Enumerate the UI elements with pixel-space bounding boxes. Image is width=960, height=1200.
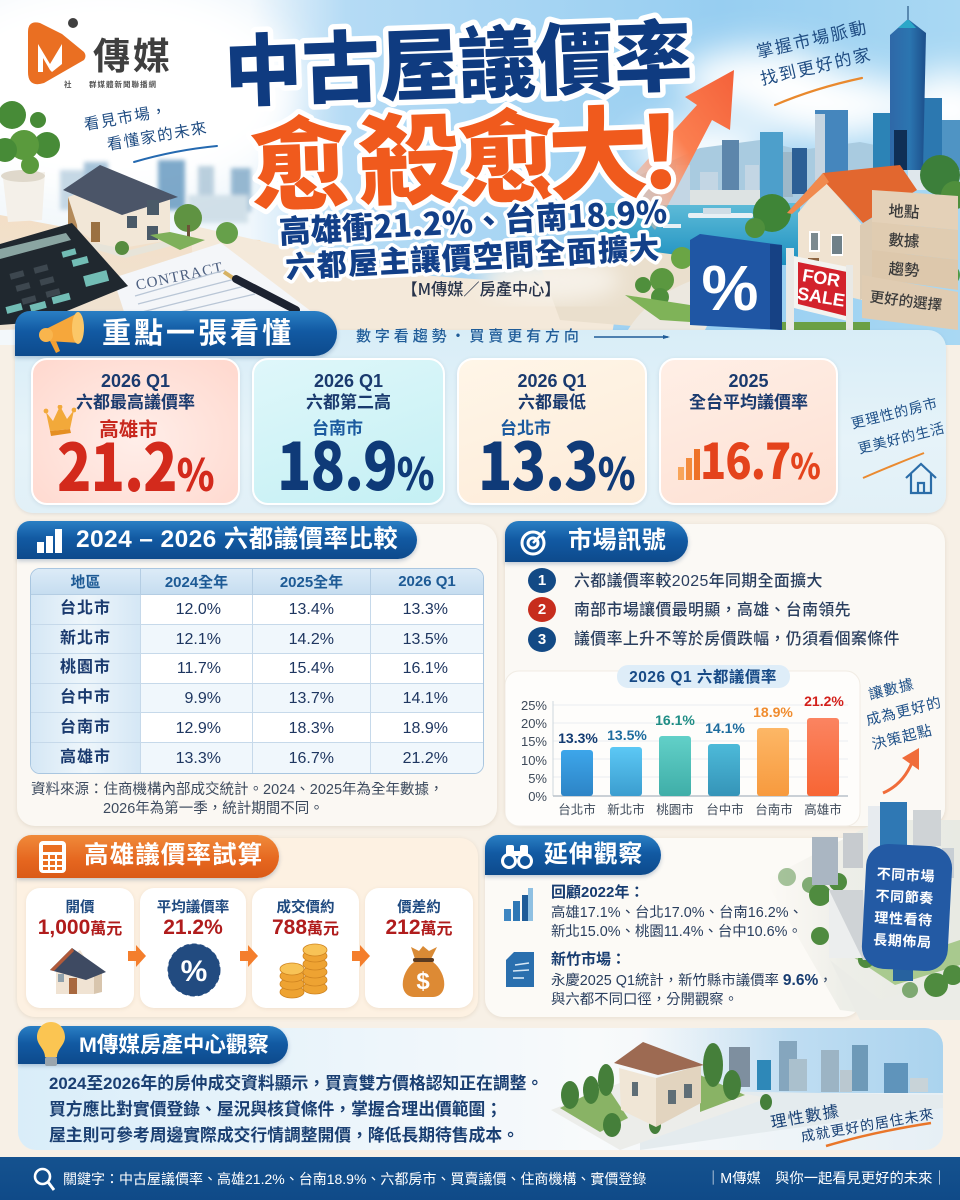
- stat card: Taipei: 台北市: [500, 419, 551, 438]
- bar chart: 2026 Q1: 25%: [521, 698, 547, 713]
- blue sign: 不同市場: [876, 865, 935, 884]
- stone blocks with words: 趨勢: [888, 260, 920, 280]
- bar chart: 2026 Q1: 18.9%: [753, 704, 793, 720]
- stat card: Taipei: 13.3%: [478, 415, 635, 509]
- comparison table: 13.5%: [403, 631, 448, 648]
- comparison table: 13.7%: [289, 690, 334, 707]
- subtitle line 1: 高雄衝21.2%、台南18.9%: [278, 187, 668, 253]
- contract: CONTRACT: [135, 260, 225, 294]
- comparison table: 21.2%: [403, 750, 448, 767]
- comparison table: 13.4%: [289, 601, 334, 618]
- stat card: national average: 2025: [728, 371, 769, 391]
- icon: magnifier: [34, 1168, 55, 1191]
- bar chart: 2026 Q1: 14.1%: [705, 720, 745, 736]
- observation text: 買方應比對實價登錄、屋況與核貸條件，掌握合理出價範圍；: [49, 1100, 502, 1119]
- stat card: Taipei: [457, 358, 647, 505]
- panel: key figures: [15, 330, 946, 513]
- logo: 群媒體新聞聯播網: [89, 79, 157, 90]
- panel: market signals: [505, 524, 945, 826]
- icon: percent badge: %: [181, 955, 207, 988]
- comparison table: 11.7%: [177, 660, 221, 677]
- signal 1: [528, 568, 823, 593]
- stat card: Kaohsiung: [31, 358, 240, 505]
- heading: M media observation: M傳媒房產中心觀察: [79, 1033, 269, 1057]
- comparison table: 9.9%: [185, 690, 221, 707]
- subtitle line 2: 六都屋主讓價空間全面擴大: [284, 223, 662, 287]
- boats: [663, 208, 753, 228]
- calc card: deal price: 成交價約: [276, 900, 334, 916]
- arrow 3: [352, 945, 370, 967]
- keywords: 關鍵字：中古屋議價率、高雄21.2%、台南18.9%、六都房市、買賣議價、住商機構、實價登錄: [63, 1171, 646, 1187]
- heading: M media observation: [18, 1026, 288, 1064]
- handwritten note: rational data: 理性數據: [768, 1097, 842, 1133]
- calc card: price difference: [365, 888, 473, 1008]
- trees right: [625, 155, 960, 332]
- bar chart: 2026 Q1: 2026 Q1 六都議價率: [629, 667, 777, 686]
- potted plant: [0, 101, 60, 222]
- desk surface: [0, 215, 330, 330]
- handwritten note: better life: 更美好的生活: [856, 418, 947, 458]
- icon: calculator: [39, 841, 66, 873]
- review 2022 block: 高雄17.1%、台北17.0%、台南16.2%、: [551, 905, 803, 921]
- slogan: ｜M傳媒 與你一起看見更好的未來｜: [706, 1171, 947, 1187]
- handwritten note left: 看懂家的未來: [105, 116, 209, 155]
- stat card: Kaohsiung: 高雄市: [99, 419, 158, 441]
- percent block: [690, 234, 782, 330]
- bar chart: 2026 Q1: 13.3%: [558, 730, 598, 746]
- calc card: asking price: 1,000萬元: [38, 916, 122, 939]
- handwritten note: rational data: 成就更好的居住未來: [799, 1103, 936, 1147]
- panel: price calculation: [17, 838, 478, 1017]
- observation text: 屋主則可參考周邊實際成交行情調整開價，降低長期待售成本。: [49, 1126, 519, 1145]
- byline: 【M傳媒／房產中心】: [401, 276, 561, 300]
- stat card: Kaohsiung: 六都最高議價率: [76, 393, 195, 412]
- calc card: average rate: [140, 888, 246, 1008]
- comparison table: 16.1%: [403, 660, 448, 677]
- icon: house outline: [905, 462, 937, 494]
- comparison table: 2026 Q1: [398, 573, 456, 590]
- logo: 傳媒: [93, 26, 173, 80]
- heading: further observation: 延伸觀察: [544, 841, 643, 868]
- logo: 社: [64, 79, 72, 90]
- icon: money bag: [402, 946, 444, 997]
- bar chart: 2026 Q1: 台南市: [755, 802, 793, 817]
- hsinchu block: 新竹市場：: [551, 951, 626, 968]
- bar chart: 2026 Q1: 20%: [521, 716, 547, 731]
- hsinchu block: 與六都不同口徑，分開觀察。: [551, 992, 738, 1008]
- handwritten note: better life: 更理性的房市: [849, 393, 940, 433]
- blue sign: 不同節奏: [875, 887, 934, 906]
- blue sign: 理性看待: [874, 909, 933, 928]
- comparison table: 地區: [70, 574, 100, 591]
- comparison table: 15.4%: [289, 660, 334, 677]
- signal 3: 議價率上升不等於房價跌幅，仍須看個案條件: [574, 631, 900, 648]
- icon: target: [520, 530, 546, 556]
- comparison table: 2024全年: [165, 574, 228, 591]
- handwritten note left: [82, 98, 217, 162]
- comparison table: 14.1%: [403, 690, 448, 707]
- bar chart: 2026 Q1: 0%: [528, 789, 547, 804]
- review 2022 block: 新北15.0%、桃園11.4%、台中10.6%。: [551, 924, 802, 940]
- for sale sign: [786, 248, 853, 333]
- observation text: 2024至2026年的房仲成交資料顯示，買賣雙方價格認知正在調整。: [49, 1074, 543, 1093]
- comparison table: 12.1%: [176, 631, 221, 648]
- signal 1: 六都議價率較2025年同期全面擴大: [574, 573, 823, 590]
- stat card: Taipei: 2026 Q1: [517, 371, 587, 391]
- heading: comparison table: [17, 521, 417, 559]
- panel: further observation: [485, 838, 861, 1017]
- heading: market signals: [505, 521, 688, 562]
- observation text: [49, 1074, 543, 1145]
- hero illustration and title: [0, 0, 960, 345]
- stat card: Tainan: 台南市: [312, 419, 363, 438]
- panel: M media observation: [18, 1028, 943, 1150]
- logo: [28, 18, 173, 90]
- icon: percent badge: [168, 944, 220, 996]
- heading: market signals: 市場訊號: [568, 527, 666, 554]
- bar chart: 2026 Q1: 桃園市: [656, 802, 694, 817]
- icon: coins: [280, 944, 328, 998]
- source note: [31, 781, 444, 816]
- icon: money bag: $: [416, 968, 430, 995]
- arrow 1: [128, 945, 146, 967]
- arrow 2: [240, 945, 258, 967]
- handwritten note: decision: 讓數據: [866, 673, 916, 704]
- for sale sign: FOR: [801, 265, 842, 291]
- stat card: Taipei: 六都最低: [518, 393, 586, 412]
- calc card: asking price: [26, 888, 134, 1008]
- bar chart: 2026 Q1: 21.2%: [804, 693, 844, 709]
- handwritten note right: 找到更好的家: [758, 40, 874, 90]
- icon: crown: [44, 405, 76, 436]
- icon: house: [50, 948, 106, 994]
- heading: key figures: [15, 311, 337, 356]
- icon: rising bars: [504, 888, 533, 921]
- icon: light bulb: [37, 1022, 65, 1066]
- growth arrow: [620, 70, 734, 230]
- arrow: rising: [882, 748, 919, 794]
- stat card: national average: 全台平均議價率: [689, 393, 808, 412]
- bar chart: 2026 Q1: 台中市: [706, 802, 744, 817]
- stat card: national average: [659, 358, 838, 505]
- main title line 2: 愈殺愈大！: [247, 70, 712, 231]
- comparison table: 13.3%: [403, 601, 448, 618]
- stat card: Tainan: 2026 Q1: [314, 371, 383, 391]
- comparison table: 2025全年: [280, 574, 343, 591]
- calculator: [0, 223, 128, 325]
- panel: comparison table: [17, 524, 497, 826]
- heading: comparison table: 2024 – 2026 六都議價率比較: [76, 526, 398, 553]
- bar chart: 2026 Q1: 台北市: [558, 802, 596, 817]
- comparison table: 高雄市: [60, 749, 111, 766]
- house with orange roof: [787, 165, 917, 300]
- handwritten note: decision: 決策起點: [869, 719, 935, 754]
- icon: binoculars: [501, 845, 533, 869]
- city scene with sign: [778, 802, 960, 1020]
- calc card: price difference: 價差約: [397, 900, 441, 916]
- comparison table: 台中市: [60, 689, 111, 706]
- skyline: [660, 6, 960, 205]
- calc card: average rate: 21.2%: [163, 916, 223, 939]
- blue sign: 長期佈局: [873, 931, 932, 950]
- calc card: deal price: 788萬元: [272, 916, 339, 939]
- blue sign: [861, 843, 953, 981]
- comparison table: [30, 568, 484, 774]
- bar chart: 2026 Q1: 5%: [528, 771, 547, 786]
- hsinchu block: [506, 951, 833, 1008]
- percent block: %: [702, 252, 758, 324]
- signal 3: 3: [538, 631, 546, 648]
- hsinchu block: 永慶2025 Q1統計，新竹縣市議價率 9.6%，: [551, 972, 833, 989]
- heading: price calculation: [17, 835, 279, 878]
- handwritten note: rational data: [768, 1097, 936, 1148]
- signal 2: [528, 597, 851, 622]
- bar chart: 2026 Q1: 15%: [521, 734, 547, 749]
- review 2022 block: [504, 884, 803, 940]
- mountains and harbor: [480, 140, 900, 340]
- comparison table: 12.0%: [176, 601, 221, 618]
- for sale sign: SALE: [796, 283, 846, 311]
- signal 1: 1: [538, 572, 546, 589]
- comparison table: 台北市: [60, 600, 111, 617]
- tagline with arrow: 數字看趨勢・買賣更有方向: [356, 328, 583, 345]
- handwritten note: decision: [864, 673, 944, 794]
- stat card: national average: 16.7%: [700, 423, 821, 494]
- comparison table: 12.9%: [176, 720, 221, 737]
- handwritten note: decision: 成為更好的: [864, 691, 944, 730]
- small model house: [63, 165, 238, 258]
- comparison table: 台南市: [60, 719, 111, 736]
- calc card: deal price: [252, 888, 359, 1008]
- pen: [224, 272, 296, 310]
- stat card: Tainan: 18.9%: [277, 415, 434, 509]
- calc card: asking price: 開價: [66, 900, 94, 916]
- source note: 資料來源：住商機構內部成交統計。2024、2025年為全年數據，: [31, 782, 444, 798]
- comparison table: 16.7%: [289, 750, 334, 767]
- handwritten note right: 掌握市場脈動: [754, 13, 870, 63]
- stat card: Tainan: 六都第二高: [306, 393, 391, 412]
- bar chart: 2026 Q1: 新北市: [607, 802, 645, 817]
- stone blocks with words: 更好的選擇: [869, 289, 943, 314]
- stone blocks with words: 地點: [888, 202, 920, 222]
- stat card: Kaohsiung: 21.2%: [57, 416, 214, 510]
- icon: megaphone: [39, 312, 84, 353]
- comparison table: 桃園市: [60, 659, 111, 676]
- comparison table: 14.2%: [289, 631, 334, 648]
- scene: house and city: [552, 1028, 943, 1150]
- handwritten note left: 看見市場，: [82, 98, 170, 135]
- stone blocks with words: [862, 190, 958, 330]
- stat card: Kaohsiung: 2026 Q1: [101, 371, 170, 391]
- calc card: average rate: 平均議價率: [157, 900, 229, 916]
- icon: rising bars: [678, 449, 700, 480]
- comparison table: 13.3%: [176, 750, 221, 767]
- footer bar: [0, 1157, 960, 1200]
- contract: [113, 243, 312, 330]
- comparison table: 18.3%: [289, 720, 334, 737]
- bar chart: 2026 Q1: 高雄市: [804, 802, 842, 817]
- stat card: Tainan: [252, 358, 445, 505]
- stone blocks with words: 數據: [888, 231, 920, 251]
- bar chart: 2026 Q1: 13.5%: [607, 727, 647, 743]
- handwritten note right: [754, 13, 874, 105]
- heading: key figures: 重點一張看懂: [102, 318, 294, 350]
- heading: further observation: [485, 835, 661, 875]
- icon: bar chart: [37, 529, 62, 553]
- comparison table: 新北市: [60, 630, 111, 647]
- source note: 2026年為第一季，統計期間不同。: [103, 800, 324, 816]
- review 2022 block: 回顧2022年：: [551, 884, 644, 901]
- bar chart: 2026 Q1: 10%: [521, 753, 547, 768]
- bar chart: 2026 Q1: [505, 665, 860, 826]
- calc card: price difference: 212萬元: [385, 916, 453, 939]
- icon: document: [506, 952, 534, 987]
- heading: price calculation: 高雄議價率試算: [84, 842, 263, 869]
- comparison table: 18.9%: [403, 720, 448, 737]
- signal 2: 南部市場讓價最明顯，高雄、台南領先: [574, 602, 851, 619]
- signal 3: [528, 627, 900, 652]
- handwritten note: better life: [849, 393, 947, 494]
- bar chart: 2026 Q1: 16.1%: [655, 712, 695, 728]
- signal 2: 2: [538, 601, 546, 618]
